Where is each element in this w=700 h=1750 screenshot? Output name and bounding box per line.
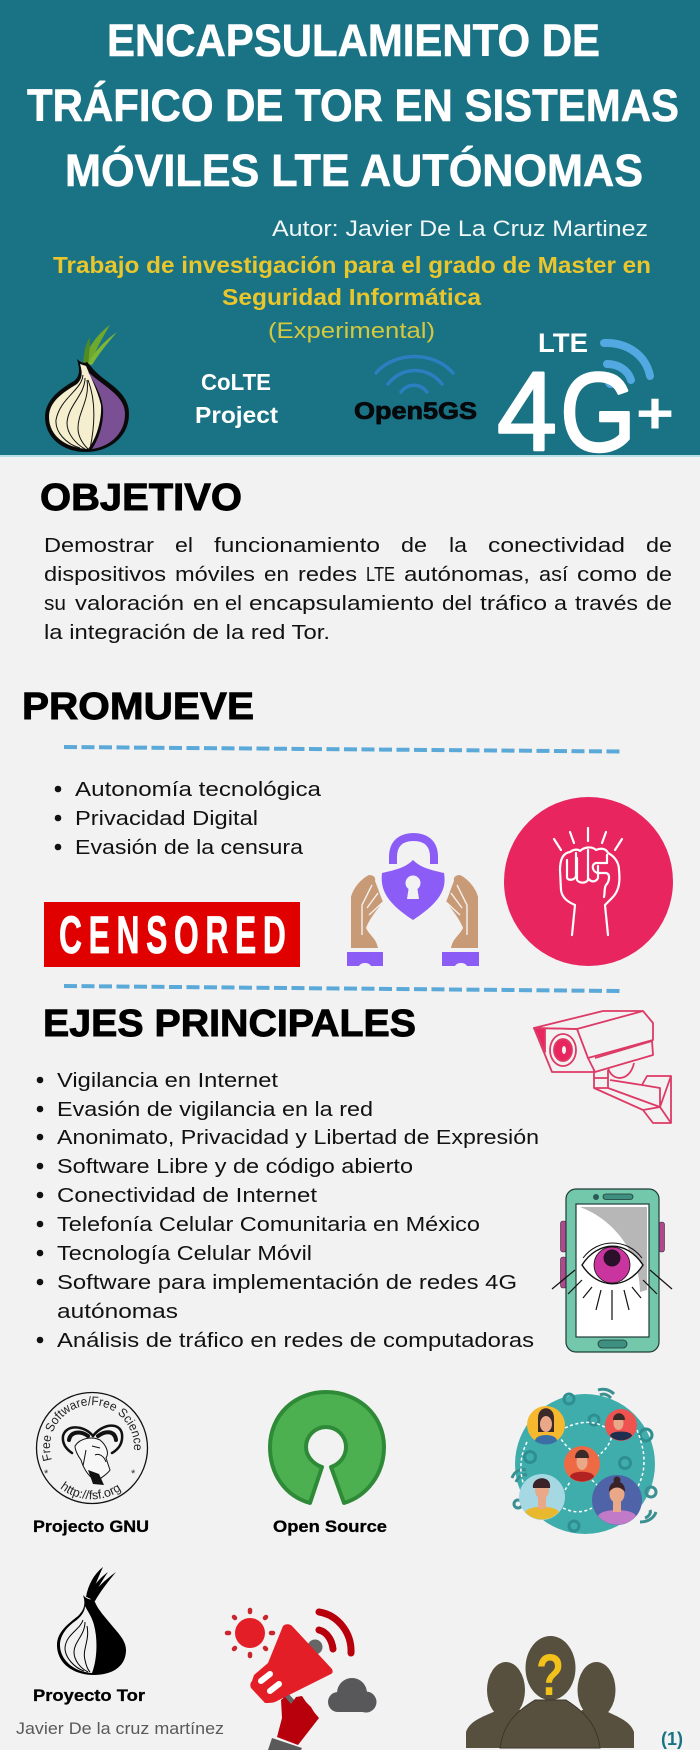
logo: Open5GS: Open5GS [354,398,477,425]
footer credit: Javier De la cruz martínez [16,1720,224,1738]
list: promueve: Autonomía tecnológica [75,778,322,801]
text block: objective [44,534,672,644]
logo: LTE 4G+: G [560,350,636,475]
list: ejes principales: Anonimato, Privacidad y Libertad de Expresión [57,1126,539,1149]
heading: EJES PRINCIPALES: EJES PRINCIPALES [43,1003,416,1045]
heading: PROMUEVE: PROMUEVE [22,686,254,728]
text block: objective: el [175,534,193,557]
text block: objective: móviles [175,563,255,586]
text block: objective: en [264,563,289,586]
subtitle: Seguridad Informática [222,284,481,310]
text block: objective: tráfico [480,592,547,615]
label: Projecto GNU: Projecto GNU [33,1517,149,1536]
list: ejes principales: Software Libre y de código abierto [57,1155,413,1178]
reference number: (1) [661,1729,683,1749]
icon: megaphone [227,1610,376,1750]
heading: OBJETIVO: OBJETIVO [40,477,242,519]
list: ejes principales: autónomas [57,1300,178,1323]
experimental note: (Experimental) [268,318,435,343]
text block: objective: en [193,592,219,615]
author: Autor: Javier De La Cruz Martinez [272,216,648,241]
text block: objective: redes [298,563,357,586]
badge: censored: CENSORED [59,906,286,965]
icon: GNU seal: http://fsf.org [60,1481,122,1500]
person 1 [527,1406,565,1445]
logo: Open5GS [354,356,477,425]
text block: objective: autónomas, [404,563,530,586]
person 3 [564,1446,600,1482]
panel: header [0,0,700,475]
text block: objective: como [577,563,637,586]
text block: objective: valoración [75,592,184,615]
icon: GNU seal: * [44,1468,49,1480]
text block: objective: de [646,592,672,615]
text block: objective: dispositivos [44,563,166,586]
text block: objective: través [575,592,638,615]
label: Open Source: Open Source [273,1517,387,1536]
text block: objective: del [442,592,472,615]
icon: people network [512,1389,656,1534]
text block: objective: la integración de la red Tor. [44,621,330,644]
list: ejes principales: Vigilancia en Internet [57,1069,278,1092]
CoLTE label: Project [195,402,278,428]
icon: hands protecting padlock [347,837,479,966]
logo: LTE 4G+ [497,328,674,475]
icon: GNU seal: * [131,1468,136,1480]
list: ejes principales: Análisis de tráfico en redes de computadoras [57,1329,534,1352]
list: ejes principales: Software para implementación de redes 4G [57,1271,517,1294]
text block: objective: su [44,592,66,615]
title: ENCAPSULAMIENTO DE [107,15,600,66]
person 4 [519,1474,565,1520]
text block: objective: la [449,534,468,557]
text block: objective: conectividad [488,534,625,557]
icon: open source logo [270,1392,384,1503]
icon: raised fist in circle [504,797,673,966]
icon: anonymous people: ? [536,1643,564,1708]
logo: LTE 4G+: 4 [497,349,557,474]
title [27,15,679,196]
logo: LTE 4G+: LTE [538,328,588,358]
icon: phone with eye [552,1189,672,1352]
list: promueve [55,778,322,859]
text block: objective: de [646,534,672,557]
list: ejes principales: Conectividad de Internet [57,1184,317,1207]
icon: anonymous people [466,1636,634,1748]
list: ejes principales: Evasión de vigilancia en la red [57,1098,373,1121]
text block: objective: el [225,592,242,615]
label: Proyecto Tor: Proyecto Tor [33,1686,145,1705]
subtitle [53,252,651,310]
text block: objective: de [646,563,672,586]
list: promueve: Evasión de la censura [75,836,304,859]
text block: objective: de [401,534,427,557]
icon: GNU seal [36,1392,148,1504]
list: ejes principales: Tecnología Celular Móvil [57,1242,312,1265]
CoLTE label: CoLTE [201,369,271,395]
text block: objective: así [539,563,568,586]
list: ejes principales: Telefonía Celular Comunitaria en México [57,1213,480,1236]
icon: Tor onion [45,325,129,452]
list: promueve: Privacidad Digital [75,807,258,830]
CoLTE label [195,369,278,428]
text block: objective: a [554,592,568,615]
text block: objective: encapsulamiento [249,592,434,615]
logo: LTE 4G+: + [636,381,674,446]
icon: Tor black onion [57,1567,126,1675]
text block: objective: LTE [366,563,395,586]
person 2 [605,1409,637,1441]
text block: objective: funcionamiento [214,534,380,557]
list: ejes principales [37,1069,539,1352]
icon: surveillance camera [534,1011,671,1123]
text block: objective: Demostrar [44,534,154,557]
subtitle: Trabajo de investigación para el grado de Master en [53,252,651,278]
icon: GNU seal: Free Software/Free Science [42,1396,141,1462]
person 5 [592,1475,642,1525]
title: MÓVILES LTE AUTÓNOMAS [65,145,643,196]
